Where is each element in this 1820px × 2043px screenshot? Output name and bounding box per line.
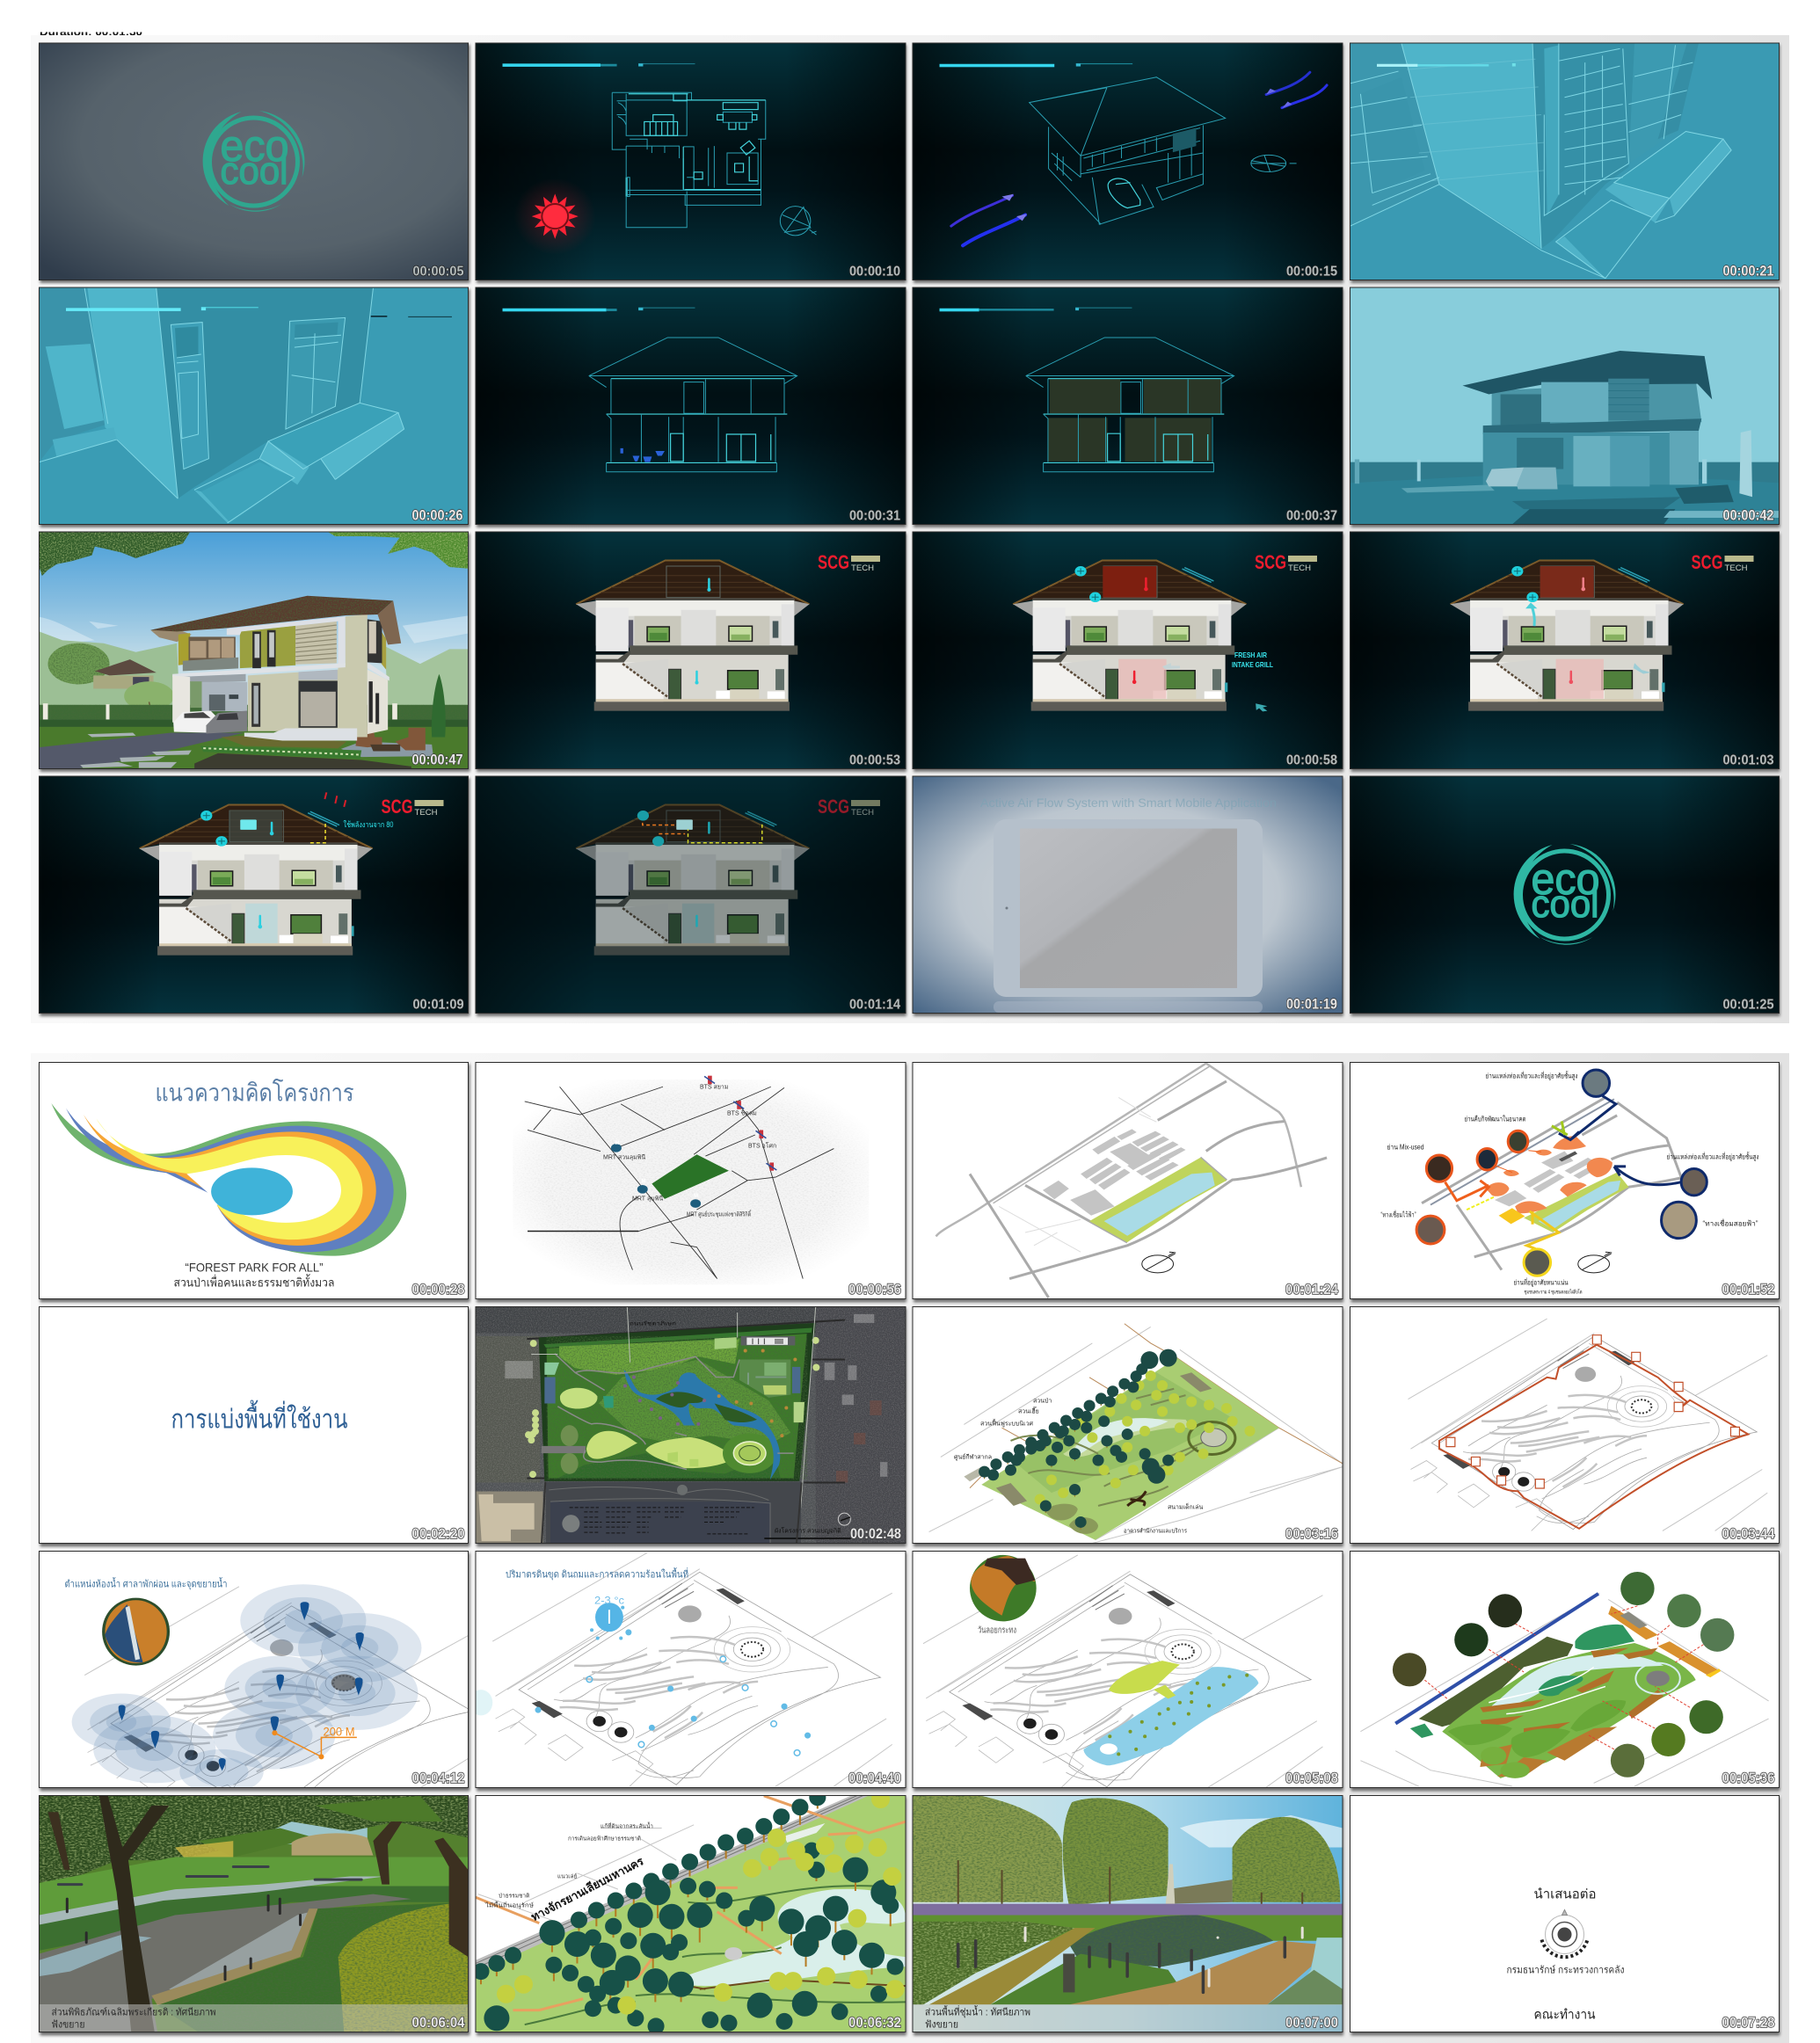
label: fresh air intake grill: [1232, 651, 1273, 669]
thumbnail: wireframe floor plan with red sun, 00:00:10: [476, 43, 906, 283]
isometric house wireframe: [939, 63, 1329, 248]
district labels: [1380, 1071, 1759, 1296]
timestamp: 00:00:15: [1286, 264, 1337, 280]
timestamp: 00:01:24: [1285, 1282, 1339, 1298]
icon: eco cool logo: cool: [220, 149, 288, 193]
map labels: M: [694, 1194, 698, 1199]
timestamp: 00:00:47: [411, 752, 462, 768]
thumbnail: museum garden perspective photo, 00:06:04: [39, 1795, 470, 2036]
thumbnail: teal close-up of door, window and steps, 00:00:26: [39, 287, 470, 527]
thumbnail: credits slide with treasury seal, 00:07:28: [1350, 1795, 1780, 2036]
map labels: BTS สยาม: [700, 1085, 728, 1090]
house cutaway: [575, 559, 810, 711]
small labels: [484, 1821, 653, 1909]
planting labels: [954, 1398, 1203, 1535]
dimmed house cutaway: [564, 777, 817, 1013]
thumbnail: teal close-up of brick wall and steps, 00:00:21: [1350, 43, 1780, 283]
district labels: ย่านแหล่งท่องเที่ยวและที่อยู่อาศัยชั้นสูง: [1486, 1071, 1578, 1081]
thumbnail: wetland boardwalk perspective photo, 00:07:00: [913, 1795, 1343, 2036]
icon: eco cool logo: [203, 111, 304, 212]
timestamp: 00:07:00: [1285, 2015, 1338, 2031]
thumbnail: wireframe house isometric with wind arrows, 00:00:15: [913, 43, 1343, 283]
logo: SCG tech: SCG: [1255, 551, 1286, 573]
thumbnail: house section with fresh air intake label, 00:00:58: [913, 532, 1343, 772]
map labels: MRT ศูนย์ประชุมแห่งชาติสิริกิติ์: [687, 1210, 752, 1218]
map labels: BTS ชิดลม: [727, 1109, 757, 1116]
icon: eco cool logo: eco: [220, 121, 288, 171]
logo: SCG tech: [818, 551, 880, 573]
timestamp: 00:01:14: [849, 997, 900, 1013]
garden perspective: [40, 1796, 468, 2032]
planting labels: อาคารสำนักงานและบริการ: [1124, 1528, 1187, 1535]
label: energy saving: ใช้พลังงานจาก 80: [343, 820, 394, 829]
logo: dimmed SCG tech: TECH: [851, 808, 874, 817]
district labels: “ทางเชื่อมสอยฟ้า”: [1702, 1218, 1758, 1227]
thumbnail: wireframe house section, 00:00:31: [476, 287, 906, 527]
logo: SCG tech: [382, 796, 443, 818]
tree planting plan: [928, 1323, 1342, 1543]
timestamp: 00:00:53: [849, 752, 900, 768]
planting labels: สวนป่า: [1033, 1398, 1052, 1405]
clipped header text above first sheet: Duration: 00:01:30: [40, 25, 142, 39]
timestamp: 00:01:09: [413, 997, 464, 1013]
label: 200 M: 200 M: [324, 1725, 355, 1739]
thumbnail: site boundary and access points, 00:03:44: [1350, 1306, 1780, 1547]
timestamp: 00:02:48: [850, 1526, 901, 1542]
thumbnail: house section with rising air arrow, 00:01:03: [1350, 532, 1780, 772]
route label: ทางจักรยานเลียบมหานคร: [528, 1854, 645, 1923]
timestamp: 00:05:36: [1722, 1770, 1774, 1786]
caption band: ส่วนพื้นที่ชุ่มน้ำ : ทัศนียภาพ: [925, 2004, 1030, 2018]
thumbnail: section title area division, 00:02:20: [39, 1306, 470, 1547]
timestamp: 00:00:37: [1286, 508, 1337, 524]
timestamp: 00:00:28: [411, 1282, 464, 1298]
tagline: “FOREST PARK FOR ALL”: [185, 1261, 324, 1275]
heading: การแบ่งพื้นที่ใช้งาน: [171, 1400, 348, 1435]
thumbnail: eco cool logo on dark, 00:01:25: [1350, 776, 1780, 1016]
panel: bottom contact sheet background: [31, 1053, 1789, 2043]
map labels: MRT สวนลุมพินี: [603, 1153, 645, 1160]
thumbnail: location map with green site, 00:00:56: [476, 1062, 906, 1303]
house cutaway with hot attic: [1013, 559, 1268, 712]
icon: treasury department seal: [1542, 1909, 1588, 1957]
thumbnail: site context with districts and routes, 00:01:52: [1350, 1062, 1780, 1303]
label: fresh air intake grill: FRESH AIR: [1234, 651, 1267, 659]
thumbnail: colored forest zones with photos, 00:05:36: [1350, 1551, 1780, 1792]
district labels: “ทางเชื่อมไว้ฟ้า”: [1380, 1210, 1416, 1218]
thumbnail: dimmed house section with dashed airflow, 00:01:14: [476, 776, 906, 1016]
district labels: ย่านแหล่งท่องเที่ยวและที่อยู่อาศัยชั้นสูง: [1667, 1152, 1759, 1162]
road label: ถนนรัชดาภิเษก: [630, 1320, 676, 1327]
thumbnail: aerial master plan, 00:02:48: [476, 1306, 906, 1547]
timestamp: 00:00:58: [1286, 752, 1337, 768]
thumbnail: restroom coverage map, 00:04:12: [39, 1551, 484, 1821]
label: event: วันลอยกระทง: [978, 1626, 1016, 1635]
label: temperature drop: 2-3 °c: [594, 1595, 624, 1607]
forest zones map: [1360, 1572, 1769, 1786]
icon: eco cool logo: cool: [1532, 883, 1598, 926]
aerial master plan: [477, 1307, 906, 1543]
map labels: [603, 1085, 776, 1218]
caption band: [39, 2004, 468, 2032]
heading: ปริมาตรดินขุด ดินถมและการลดความร้อนในพื้นที่: [506, 1567, 688, 1581]
timestamp: 00:00:42: [1723, 508, 1774, 524]
map labels: BTS อโศก: [748, 1141, 776, 1150]
timestamp: 00:00:10: [849, 264, 900, 280]
lake map: [923, 1554, 1323, 1787]
timestamp: 00:05:08: [1285, 1770, 1338, 1786]
thumbnail: tablet mockup with faint heading, 00:01:19: [913, 776, 1343, 1016]
district labels: ย่าน Mix-used: [1387, 1143, 1424, 1152]
planting labels: สวนฟื้นฟูระบบนิเวศ: [980, 1417, 1034, 1428]
credits text: working team: คณะทำงาน: [1533, 2008, 1595, 2022]
boundary plan: [1408, 1319, 1767, 1531]
monochrome house: [1350, 351, 1779, 524]
location map: [513, 1076, 869, 1284]
timestamp: 00:01:25: [1723, 997, 1774, 1013]
thumbnail: wireframe house section with walls filled, 00:00:37: [913, 287, 1343, 527]
planting labels: ศูนย์กีฬาสากล: [954, 1454, 992, 1461]
small labels: แก้ที่ดินจากสระสันน้ำ: [601, 1821, 653, 1830]
district labels: ชุมชนพระราม 4 ชุมชนคลองไผ่สิงโต: [1525, 1289, 1583, 1296]
heading: แนวความคิดโครงการ: [155, 1078, 353, 1106]
planting labels: สนามเด็กเล่น: [1168, 1503, 1203, 1510]
timestamp: 00:03:16: [1285, 1526, 1338, 1542]
timestamp: 00:00:56: [848, 1282, 901, 1298]
section wireframe: [503, 308, 798, 473]
logo: SCG tech: TECH: [851, 563, 874, 572]
district labels: ย่านคืบกิจพัฒนาในอนาคต: [1465, 1115, 1526, 1123]
logo: SCG tech: SCG: [1692, 551, 1723, 573]
small labels: ไม้พื้นถิ่นอนุรักษ์: [484, 1901, 535, 1909]
house cutaway with solar: [139, 792, 373, 956]
thumbnail: monochrome teal house render, 00:00:42: [1350, 287, 1780, 527]
logo: SCG tech: [1692, 551, 1753, 573]
icon: eco cool logo: eco: [1532, 854, 1600, 904]
logo: SCG tech: [1255, 551, 1317, 573]
timestamp: 00:02:20: [411, 1526, 464, 1542]
thumbnail: close-up planting plan, 00:06:32: [476, 1795, 906, 2036]
logo: dimmed SCG tech: SCG: [818, 796, 849, 818]
logo: SCG tech: SCG: [382, 796, 413, 818]
faint heading: Active Air Flow System with Smart Mobile Application: [980, 796, 1277, 810]
icon: tablet: [994, 819, 1263, 1013]
floor plan drawing: [503, 63, 817, 250]
close-up planting plan: [477, 1796, 906, 2032]
site plan: [935, 1063, 1328, 1298]
tagline: สวนป่าเพื่อคนและธรรมชาติทั้งมวล: [174, 1273, 334, 1289]
timestamp: 00:04:40: [848, 1770, 901, 1786]
panel: top contact sheet background: [31, 35, 1789, 1023]
timestamp: 00:06:32: [848, 2015, 901, 2031]
map labels: MRT ลุมพินี: [632, 1196, 663, 1203]
planting labels: สวนเฮี๊ย: [1018, 1407, 1039, 1415]
map labels: M: [642, 1180, 645, 1185]
small labels: แนวเล่ย์: [557, 1872, 577, 1879]
coverage map: [72, 1584, 468, 1787]
logo: SCG tech: TECH: [415, 808, 438, 817]
small labels: การเดินลอยฟ้าศึกษาธรรมชาติ: [568, 1836, 641, 1843]
timestamp: 00:06:04: [411, 2015, 465, 2031]
small labels: ป่าธรรมชาติ: [499, 1892, 529, 1899]
timestamp: 00:00:21: [1723, 264, 1774, 280]
caption band: [913, 2004, 1343, 2032]
timestamp: 00:04:12: [411, 1770, 464, 1786]
section wireframe with fill: [939, 308, 1234, 473]
logo: SCG tech: SCG: [818, 551, 849, 573]
timestamp: 00:01:52: [1722, 1282, 1774, 1298]
label: fresh air intake grill: INTAKE GRILL: [1232, 660, 1273, 669]
timestamp: 00:00:26: [411, 508, 462, 524]
caption band: ฟังขยาย: [925, 2020, 958, 2031]
thumbnail: site plan with lake, 00:01:24: [913, 1062, 1343, 1303]
heading: ตำแหน่งห้องน้ำ ศาลาพักผ่อน และจุดขยายน้ำ: [65, 1577, 227, 1589]
house illustration: [40, 533, 468, 768]
logo: SCG tech: TECH: [1725, 563, 1748, 572]
icon: eco cool logo: [1514, 844, 1615, 945]
caption band: ส่วนพิพิธภัณฑ์เฉลิมพระเกียรติ : ทัศนียภาพ: [51, 2006, 216, 2018]
thumbnail: lake and wooded area map, 00:05:08: [913, 1551, 1343, 1792]
wall and steps shapes: [1350, 44, 1732, 280]
logo: dimmed SCG tech: [818, 796, 880, 818]
timestamp: 00:00:05: [413, 264, 464, 280]
thumbnail: eco cool logo on grey, 00:00:05: [39, 43, 470, 283]
thumbnail: house section with SCG logo, 00:00:53: [476, 532, 906, 772]
thumbnail: photo render of house with cars, 00:00:47: [39, 532, 470, 772]
tagline: [174, 1261, 334, 1289]
door window steps shapes: [40, 288, 452, 524]
caption band: ฟังขยาย: [51, 2020, 84, 2031]
context diagram: [1416, 1069, 1708, 1277]
thumbnail: isometric plan with trees, 00:03:16: [913, 1306, 1343, 1547]
timestamp: 00:03:44: [1722, 1526, 1775, 1542]
timestamp: 00:01:19: [1286, 997, 1337, 1013]
district labels: ย่านที่อยู่อาศัยหนาแน่น: [1514, 1276, 1569, 1287]
map labels: M: [615, 1141, 619, 1146]
thumbnail: house section with solar and 80 percent energy label, 00:01:09: [39, 776, 470, 1016]
wetland perspective: [913, 1796, 1583, 2004]
thumbnail: earthworks and cooling map, 00:04:40: [470, 1551, 906, 1792]
thumbnail: project concept swirl, 00:00:28: [39, 1062, 470, 1303]
credits text: presented to: นำเสนอต่อ: [1533, 1887, 1597, 1902]
logo: SCG tech: TECH: [1288, 563, 1311, 572]
credits text: treasury department: กรมธนารักษ์ กระทรวงการคลัง: [1507, 1964, 1625, 1976]
timestamp: 00:07:28: [1722, 2015, 1774, 2031]
timestamp: 00:01:03: [1723, 752, 1774, 768]
cooling map: [477, 1552, 892, 1786]
house cutaway with airflow: [1450, 559, 1685, 711]
chart: concept swirl: [51, 1103, 406, 1256]
timestamp: 00:00:31: [849, 508, 900, 524]
map caption: ผังโครงการ สวนเบญจกิติ: [775, 1526, 841, 1535]
